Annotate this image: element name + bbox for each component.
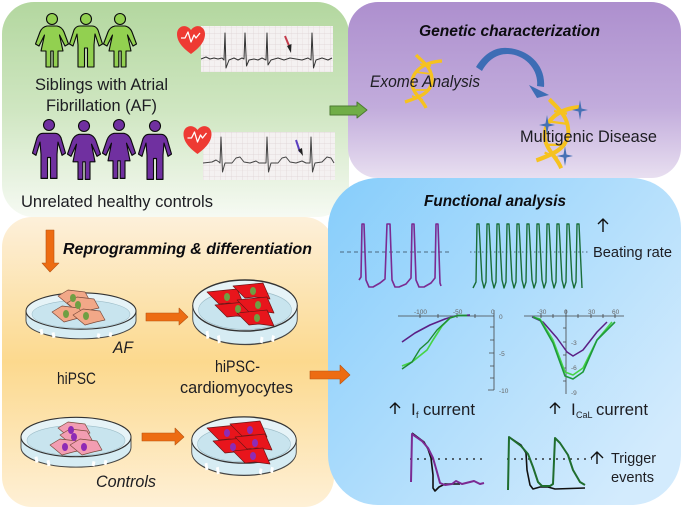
arrow: orange to functional [310,365,350,384]
text: ICaL current: I [571,400,576,419]
dish: AF cardiomyocytes [193,280,297,344]
panel: genetic characterization [348,2,681,178]
text: controls italic label: Controls [96,473,156,491]
text: cardiomyocytes label: cardiomyocytes [180,379,293,397]
text: siblings label: Siblings with Atrial [35,76,168,94]
heading: functional analysis: Functional analysis [424,193,566,210]
text: controls label: Unrelated healthy controls [21,193,213,211]
text: exome analysis: Exome Analysis [370,73,480,91]
chart: ICaL current: -9 [571,390,577,397]
chart: If current [398,309,509,395]
text: If current: current [423,400,475,419]
chart: ICaL current: 0 [564,309,568,316]
chart: If current: -100 [414,309,427,316]
text: hiPSC label: hiPSC [57,370,96,388]
text: beating rate: Beating rate [593,244,672,261]
chart: ICaL current [524,309,624,397]
heading: reprogramming: Reprogramming & differentiation [63,241,312,258]
text: If current [390,400,475,420]
text: AF label: AF [112,339,134,357]
chart: If current: -5 [499,351,505,358]
ECG: atrial fibrillation [201,26,333,72]
text: trigger events: events [611,469,654,486]
text: trigger events: Trigger [611,450,656,467]
icon: DNA helix multigenic [536,99,580,168]
heading: genetic characterization: Genetic characterization [419,23,600,40]
text: If current: I [411,400,416,419]
heart icon: AF [177,26,205,54]
icons: variant stars [539,100,588,166]
panel: functional analysis [328,178,681,505]
text: ICaL current [550,400,648,420]
dish: control hiPSC [21,417,131,467]
dish: control cardiomyocytes [192,417,296,475]
arrow: orange down [42,230,59,272]
text: multigenic disease: Multigenic Disease [520,128,657,146]
icon: DNA helix exome [405,55,442,108]
chart: If current: -10 [499,388,509,395]
arrow: green to genetic [330,102,367,118]
chart: ICaL current: 30 [588,309,596,316]
text: cardiomyocytes label [180,358,293,397]
chart: ICaL current: -30 [537,309,547,316]
arrow: curved blue [476,48,549,98]
arrow: control differentiation [142,428,184,445]
text: If current: f [416,410,419,420]
panel: siblings and controls [2,2,349,217]
chart: ICaL current: -3 [571,340,577,347]
text: siblings label [35,76,168,115]
panel: reprogramming and differentiation [2,217,334,507]
text: cardiomyocytes label: hiPSC- [215,358,260,376]
chart: If current: -50 [453,309,463,316]
chart: green action potentials [470,224,590,288]
text: ICaL current: current [596,400,648,419]
chart: purple trigger trace [410,433,485,491]
chart: purple action potentials [340,224,450,287]
text: siblings label: Fibrillation (AF) [46,97,157,115]
heart icon: control [184,126,212,154]
chart: If current: 0 [499,314,503,321]
chart: green trigger trace [507,437,592,490]
dish: AF hiPSC [26,290,136,339]
text: beating rate [593,219,672,261]
ECG: sinus rhythm [203,132,335,180]
controls icons [32,120,172,179]
chart: ICaL current: 60 [612,309,620,316]
arrow: AF differentiation [146,308,188,325]
chart: ICaL current: -6 [571,365,577,372]
chart: If current: 0 [491,309,495,316]
siblings icons [36,14,136,67]
text: ICaL current: CaL [576,410,593,420]
text: trigger events [591,450,656,486]
